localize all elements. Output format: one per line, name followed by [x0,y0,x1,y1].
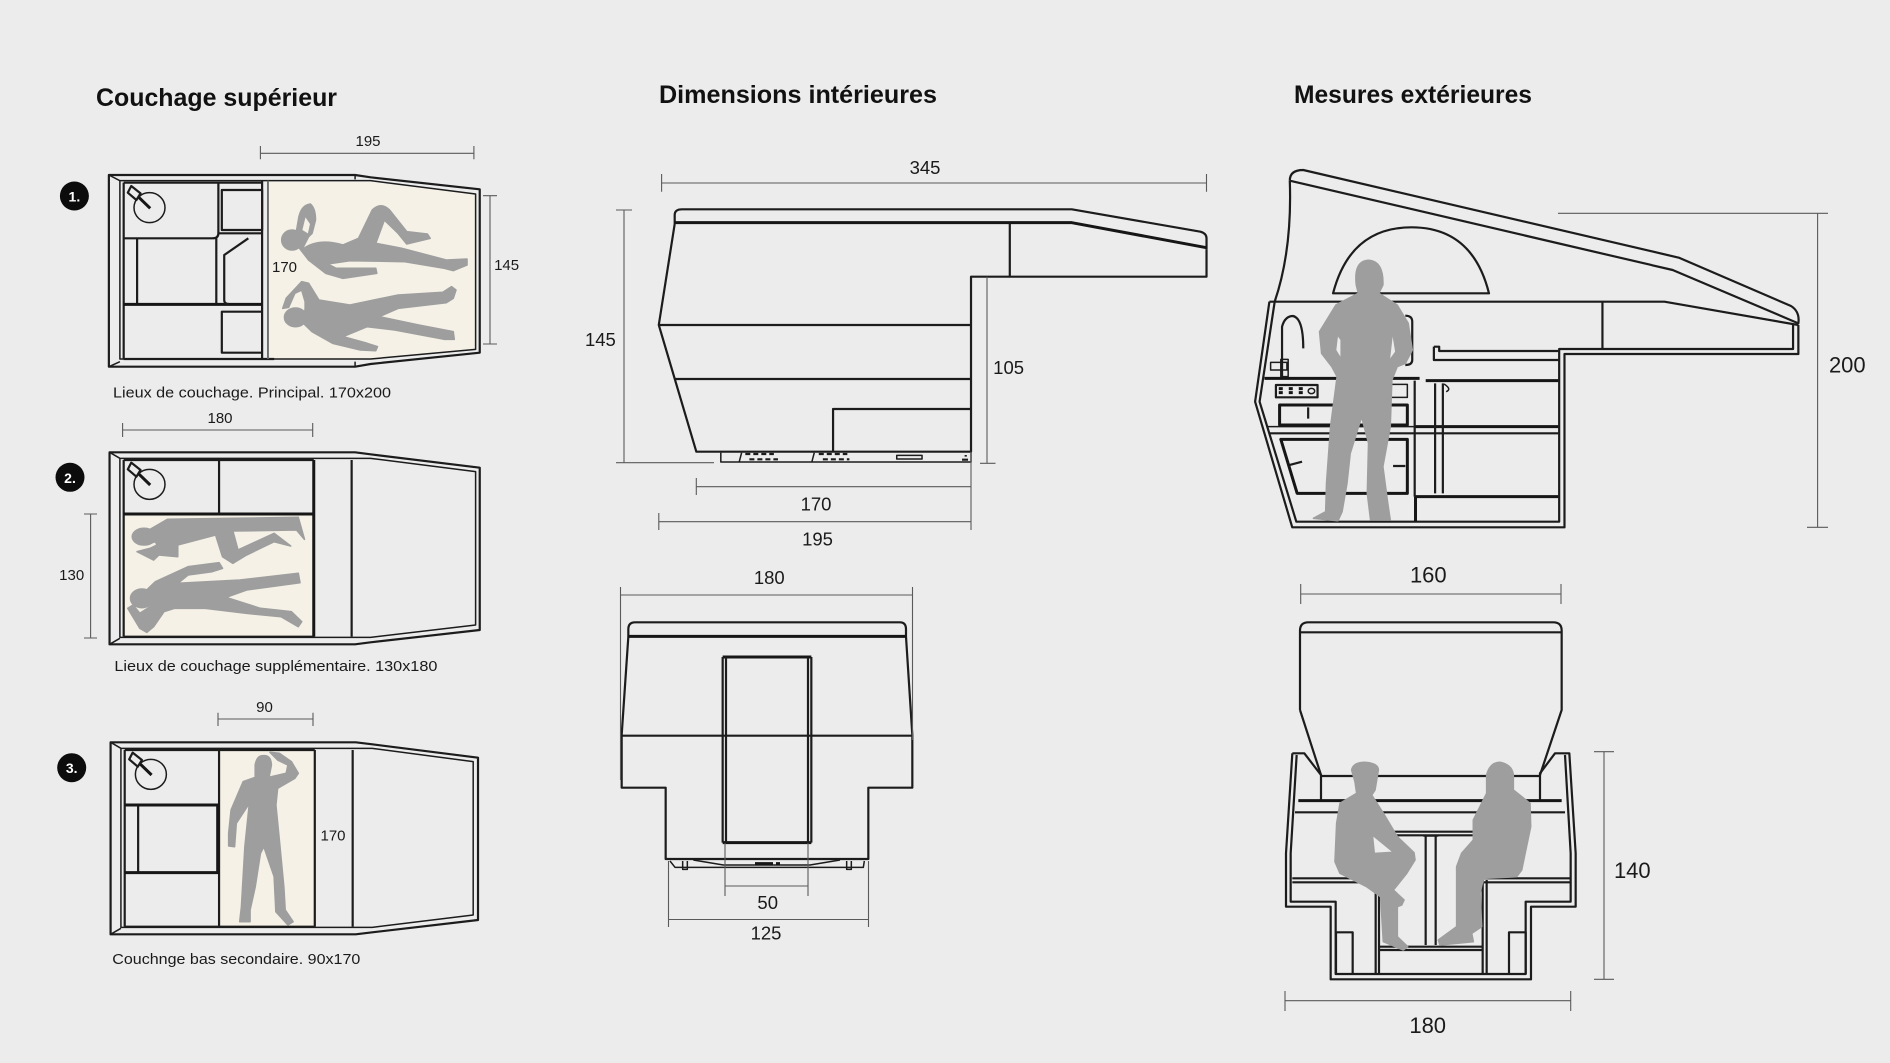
panel: exterior side view [1255,170,1866,527]
front view drawing [1286,622,1576,979]
front section drawing [622,622,912,869]
floor plan 2 [110,452,480,644]
panel: sleeping layout 2 [56,410,480,675]
dimension: 90: 90 [256,699,273,716]
badge: number 2: 2. [64,470,76,486]
caption 3: Couchnge bas secondaire. 90x170 [112,952,360,968]
floor plan 3 [111,742,478,934]
dimension: 140 [1594,752,1651,979]
detail: underfloor components [745,454,970,460]
dimension: 180 [620,567,912,780]
dimension: 130 [59,514,97,638]
dimension: 195: 195 [802,528,833,550]
dimension: 145: 145 [585,329,616,350]
badge: number 3: 3. [66,760,78,776]
heading: Couchage supérieur: Couchage supérieur [96,84,337,112]
badge: number 1: 1. [69,188,80,204]
detail: hob controls [1276,385,1318,397]
dimension: 125: 125 [751,922,781,944]
dimension: 90 [218,699,313,726]
icon: sink and tap [129,753,166,789]
dimension: 145: 145 [494,257,519,274]
caption 1: Lieux de couchage. Principal. 170x200 [113,386,391,402]
dimension: 130: 130 [59,567,84,584]
dimension: 200 [1558,213,1866,527]
heading: Mesures extérieures: Mesures extérieures [1294,81,1532,109]
dimension: 195 [659,513,971,550]
caption 2: Lieux de couchage supplémentaire. 130x180 [114,659,437,675]
dimension: 180 [123,410,313,437]
icon: sink and tap [128,463,165,499]
dimension: 345: 345 [910,157,940,178]
silhouette: lower sleeper [283,282,456,351]
dimension: 145 [585,210,714,463]
dimension: 195: 195 [355,133,381,150]
silhouette: upper sleeper [282,204,467,278]
panel: sleeping layout 3 [57,699,478,968]
dimension: 145 [483,196,519,344]
badge: number 1 [60,182,89,210]
dimension: 170: 170 [801,494,831,514]
silhouette: standing person [1313,260,1412,521]
dimension: 345 [662,157,1206,192]
dimension: 180: 180 [207,410,233,427]
dimension: 140: 140 [1614,858,1651,883]
dimension: 180: 180 [1409,1013,1446,1038]
silhouette: seated person left [1335,762,1415,950]
dimension: 105: 105 [993,357,1024,378]
silhouette: standing sleeper [229,752,298,925]
badge: number 3 [57,753,86,782]
dimension: 170 [696,452,971,530]
dimension label: 170: 170 [320,828,346,844]
dimension: 200: 200 [1829,352,1866,378]
panel: sleeping layout 1 [60,133,519,401]
dimension: 180 [1285,991,1571,1038]
silhouette: lower sleeper [128,563,302,632]
dimension: 195 [260,133,474,159]
silhouette: seated person right [1438,762,1531,945]
panel: exterior front view [1285,562,1651,1038]
table top [1378,832,1483,835]
window: semicircle [1333,227,1489,293]
dimension: 50 [725,843,808,913]
panel: interior side section [585,157,1207,550]
dimension: 160: 160 [1410,562,1447,588]
dimension: 125 [668,861,868,944]
side section drawing [659,209,1207,462]
silhouette: upper sleeper [132,517,304,563]
detail: front underside [670,860,864,869]
floor plan 1 [109,175,480,367]
dimension: 50: 50 [757,892,778,913]
dimension: 160 [1301,562,1561,604]
dimension: 105 [980,277,1024,463]
dimension: 180: 180 [754,567,785,588]
heading: Dimensions intérieures: Dimensions intérieures [659,81,937,109]
side view drawing [1255,170,1799,527]
icon: sink and tap [128,186,165,223]
icon: tap [1271,316,1303,377]
dimension label: 170: 170 [272,259,297,276]
panel: interior front section [620,567,912,944]
badge: number 2 [56,463,84,492]
